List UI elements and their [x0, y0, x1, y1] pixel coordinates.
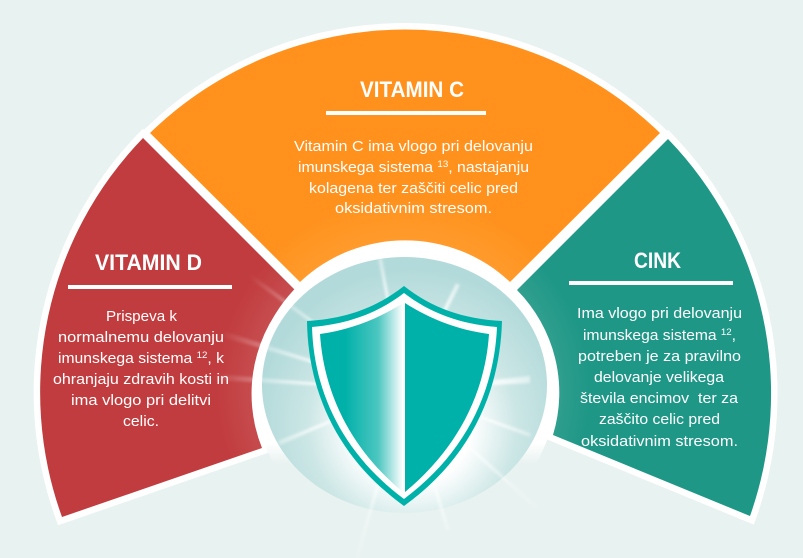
text: vitamin C description: oksidativnim stresom. — [335, 201, 492, 217]
text: vitamin D description: celic. — [123, 414, 159, 430]
text: vitamin D description: 12 — [197, 350, 207, 360]
text: vitamin D description: , k — [207, 351, 225, 367]
panel: vitamin C — [150, 30, 660, 282]
panel: cink — [517, 139, 771, 516]
heading: cink: CINK — [634, 248, 681, 273]
text: vitamin C description: Vitamin C ima vlogo pri delovanju — [294, 139, 533, 155]
panel: vitamin D — [40, 138, 295, 517]
text: vitamin D description: ohranjaju zdravih kosti in — [53, 372, 229, 388]
text: cink description: Ima vlogo pri delovanju — [577, 306, 742, 322]
text: cink description: števila encimov ter za — [580, 391, 739, 407]
text: cink description: potreben je za pravilno — [578, 349, 741, 365]
text: vitamin D description: ima vlogo pri delitvi — [71, 393, 211, 409]
text: cink description: imunskega sistema — [583, 328, 707, 344]
icon: shield — [307, 286, 502, 506]
text: cink description: zaščito celic pred — [599, 412, 720, 428]
text: cink description: , — [732, 328, 736, 344]
text: vitamin C description: imunskega sistema — [298, 160, 422, 176]
text: vitamin D description: normalnemu delovanju — [58, 330, 224, 346]
text: cink description — [577, 306, 742, 450]
heading: vitamin D: VITAMIN D — [95, 250, 202, 275]
text: vitamin D description: imunskega sistema — [58, 351, 182, 367]
central disc with rays — [212, 242, 556, 558]
text: vitamin D description: Prispeva k — [106, 309, 178, 325]
text: vitamin D description — [53, 309, 229, 430]
text: cink description: oksidativnim stresom. — [581, 434, 738, 450]
shield right half — [405, 303, 489, 492]
text: vitamin C description: , nastajanju — [448, 160, 529, 176]
text: vitamin C description: 13 — [437, 159, 448, 169]
text: cink description: 12 — [721, 327, 732, 337]
shield left half — [320, 303, 403, 492]
text: cink description: delovanje velikega — [594, 370, 725, 386]
text: vitamin C description: kolagena ter zaščiti celic pred — [309, 181, 518, 197]
text: vitamin C description — [294, 139, 533, 217]
heading: vitamin C: VITAMIN C — [360, 77, 464, 102]
